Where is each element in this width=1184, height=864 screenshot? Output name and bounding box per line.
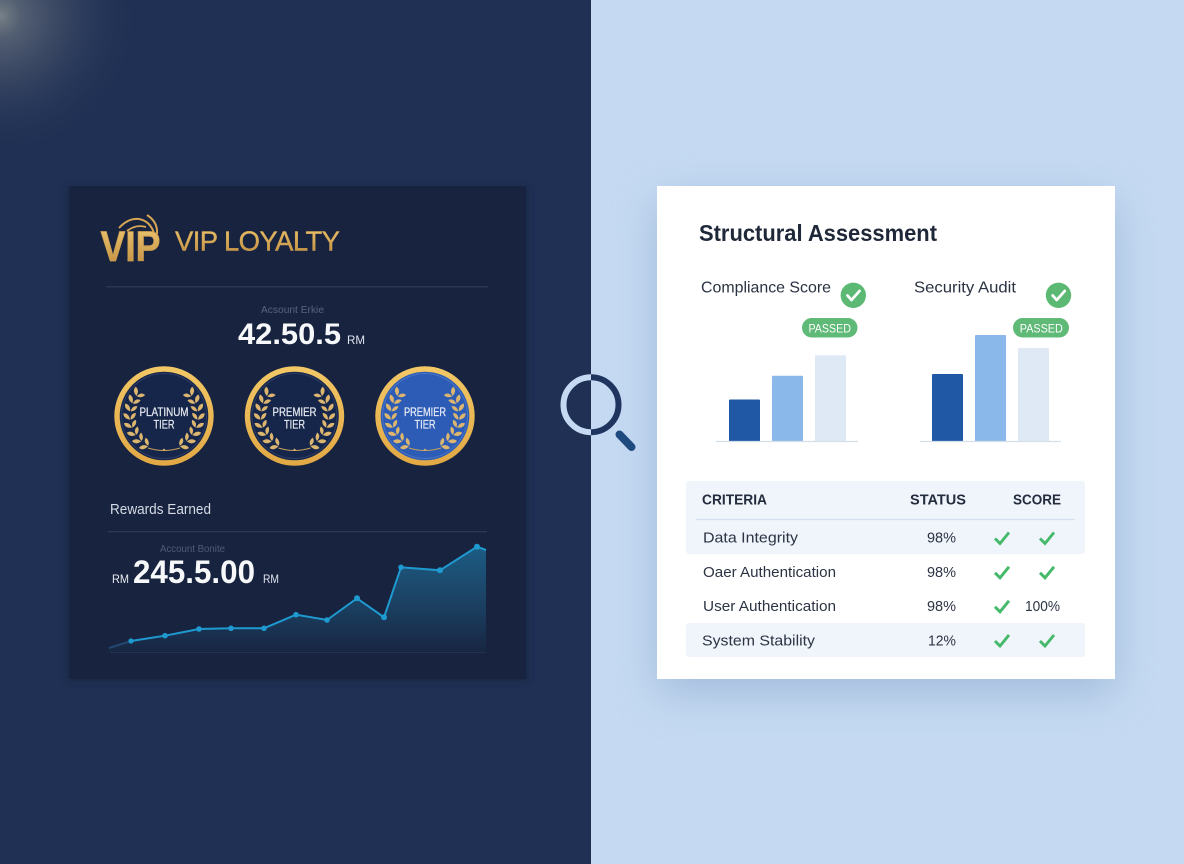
table header: STATUS: [910, 493, 966, 509]
icon: check badge: [1046, 283, 1071, 308]
badge: platinum tier: PLATINUM: [140, 407, 188, 419]
badge: platinum tier: [117, 369, 211, 463]
badge: premier tier blue: TIER: [414, 419, 436, 431]
passed pill: PASSED: [1020, 321, 1063, 335]
passed pill: PASSED: [808, 321, 851, 335]
row: oaer authentication: Oaer Authentication: [703, 564, 836, 581]
row: oaer authentication: [703, 564, 1054, 581]
account bonus label: Account Bonite: [160, 544, 225, 555]
icon: check badge: [841, 283, 866, 308]
row: data integrity: Data Integrity: [703, 530, 799, 547]
logo: VIP crest: VIP: [100, 223, 160, 271]
badge: premier tier: PREMIER: [272, 407, 316, 419]
top-left light glow: [0, 0, 170, 170]
rewards value: RM: [112, 572, 129, 586]
table header: [702, 493, 1061, 509]
row: system stability: [702, 632, 1054, 649]
account label: Acsount Erkie: [261, 305, 324, 316]
row: data integrity: 98%: [927, 530, 956, 547]
chart: security audit: Security Audit: [914, 280, 1017, 296]
rewards value: RM: [263, 572, 279, 586]
row: oaer authentication: 98%: [927, 564, 956, 581]
row: user authentication: 98%: [927, 598, 956, 615]
table: criteria: [686, 481, 1085, 657]
right light background: [591, 0, 1184, 864]
account balance: 42.50.5: [238, 318, 341, 351]
panel: VIP loyalty: [66, 186, 529, 682]
row: data integrity: [703, 530, 1054, 547]
row: user authentication: User Authentication: [703, 598, 836, 615]
badge: premier tier blue: PREMIER: [404, 407, 446, 419]
panel: structural assessment: [657, 186, 1115, 693]
rewards value: 245.5.00: [133, 554, 255, 590]
area chart: rewards trend: [109, 544, 486, 652]
passed pill: [802, 318, 858, 338]
heading: VIP LOYALTY: VIP LOYALTY: [175, 226, 340, 256]
chart: compliance score: [701, 280, 866, 442]
badge: premier tier: [248, 369, 342, 463]
chart: security audit: [914, 280, 1071, 442]
icon: magnifying glass: [563, 377, 632, 447]
row: user authentication: [703, 598, 1060, 615]
heading: structural assessment: Structural Assessment: [699, 220, 937, 246]
chart: compliance score: Compliance Score: [701, 280, 831, 296]
passed pill: [1013, 318, 1069, 338]
row: system stability: System Stability: [702, 632, 816, 649]
row: user authentication: 100%: [1025, 598, 1060, 615]
row: system stability: 12%: [928, 632, 956, 649]
badge: premier tier blue: [378, 369, 472, 463]
bars: [920, 335, 1061, 442]
left dark background: [0, 0, 591, 864]
badge: platinum tier: TIER: [154, 419, 174, 431]
badge: premier tier: TIER: [284, 419, 305, 431]
heading: rewards earned: Rewards Earned: [110, 502, 211, 518]
table header: CRITERIA: [702, 493, 767, 509]
table header: SCORE: [1013, 493, 1061, 509]
bars: [716, 355, 858, 442]
account balance: RM: [347, 333, 365, 347]
